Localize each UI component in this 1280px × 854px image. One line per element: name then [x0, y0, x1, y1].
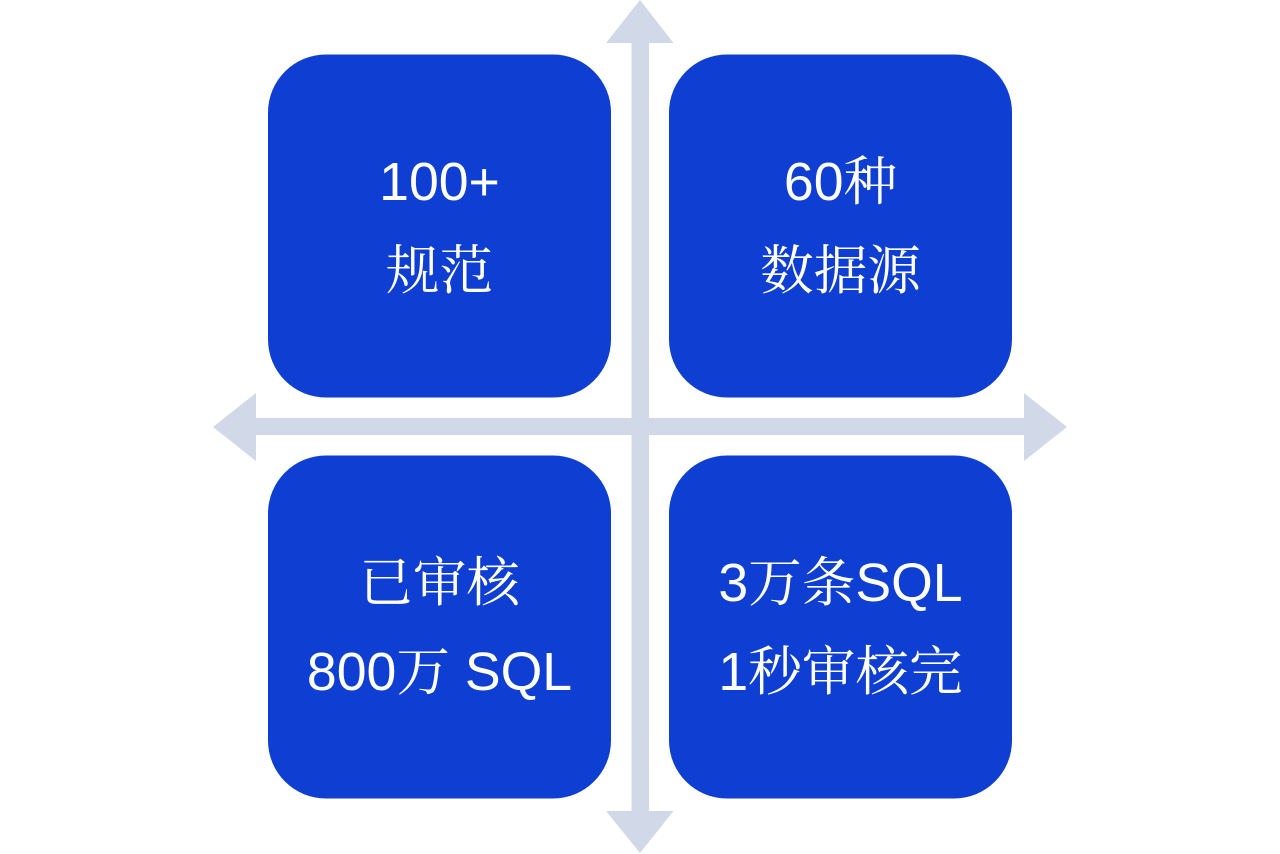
label: audited: 已审核	[359, 552, 520, 612]
label: specs: 规范	[386, 240, 493, 300]
panel: 100+ specs	[268, 54, 611, 398]
horizontal double arrow	[213, 393, 1067, 461]
vertical double arrow	[606, 0, 674, 853]
panel: 8 million SQL audited	[268, 456, 611, 798]
label: data sources: 数据源	[760, 240, 921, 300]
stat: 100+: 100+	[379, 152, 500, 212]
panel: 60 data sources	[669, 54, 1012, 398]
panel: 30k SQL per second	[669, 456, 1012, 798]
stat: 60 kinds: 60种	[784, 152, 897, 212]
label: audited in 1 second: 1秒审核完	[718, 642, 963, 702]
stat: 30k SQL: 3万条SQL	[718, 552, 963, 612]
stat: 8 million SQL: 800万 SQL	[307, 642, 572, 702]
